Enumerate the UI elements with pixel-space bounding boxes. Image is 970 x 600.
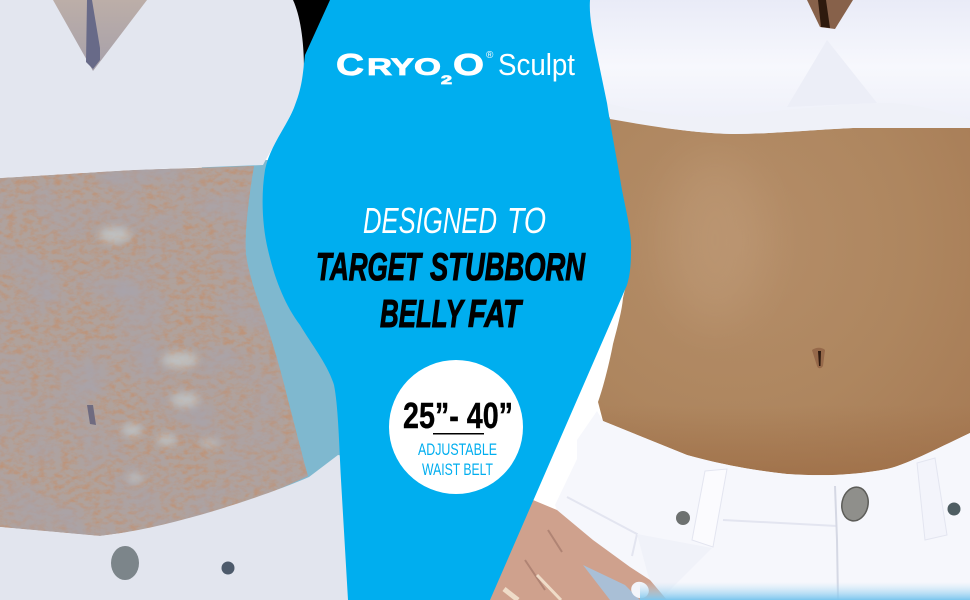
metal button [839, 485, 871, 523]
jeans shaded panel [637, 534, 712, 600]
product name: Sculpt [498, 47, 575, 82]
headline line 1: TO [507, 200, 546, 241]
headline line 2: TARGET [316, 246, 423, 289]
registered mark: ® [486, 50, 494, 61]
caption line 2: WAIST BELT [422, 460, 493, 479]
jeans [555, 411, 970, 600]
headline line 3: FAT [468, 293, 523, 336]
ring 2 [537, 575, 561, 600]
shaded fabric under fingers [583, 565, 640, 600]
logo wordmark: C [336, 47, 364, 82]
jeans button [111, 546, 139, 580]
hand [486, 500, 667, 600]
cleavage [807, 0, 853, 29]
logo wordmark [336, 47, 484, 87]
frosted skin [0, 160, 320, 540]
rivet right [948, 502, 960, 516]
panel: blue centre shape [263, 0, 631, 600]
headline line 3: BELLY [380, 293, 465, 336]
caption line 1: ADJUSTABLE [418, 440, 497, 459]
navel [812, 348, 825, 368]
pocket seam [567, 497, 637, 556]
belt loop left [692, 469, 727, 547]
finger crease [525, 530, 562, 590]
belt loop right [917, 458, 947, 540]
photo: toned torso (right) [486, 0, 970, 600]
headline line 2: STUBBORN [430, 246, 586, 289]
logo wordmark: RYO [367, 54, 441, 81]
teal waist sliver [200, 160, 360, 500]
skin highlight [665, 155, 765, 325]
waistband seam [723, 520, 837, 526]
frosted navel [87, 405, 96, 425]
headline [316, 200, 586, 336]
cleavage shadow [818, 0, 830, 28]
logo wordmark: O [453, 47, 484, 82]
bra centre gore [787, 40, 877, 107]
black corner wedge [285, 0, 335, 75]
fingernail [628, 579, 652, 600]
frosted neckline [53, 0, 147, 71]
bra [585, 0, 970, 134]
logo wordmark: 2 [441, 73, 453, 87]
jeans fly [835, 486, 838, 600]
size range: 25”- 40” [403, 395, 513, 436]
midriff lower shade [598, 300, 970, 475]
logo: Cryo2O Sculpt [336, 47, 575, 87]
jeans hem fade [640, 582, 970, 600]
ring 1 [504, 589, 518, 600]
frosted jeans [0, 455, 370, 600]
jeans rivet [222, 562, 234, 574]
neckline shadow [86, 0, 100, 69]
callout circle [389, 360, 523, 494]
photo: frosted torso (left) [0, 0, 370, 600]
pale frost blotches [99, 227, 220, 482]
rivet left [676, 511, 690, 525]
underline [433, 433, 484, 434]
bare midriff [590, 100, 970, 475]
frosted bra [0, 0, 304, 178]
navel shadow [818, 351, 821, 366]
bra band [607, 103, 970, 134]
callout: waist belt size [389, 360, 523, 494]
headline line 1: DESIGNED [363, 200, 497, 241]
